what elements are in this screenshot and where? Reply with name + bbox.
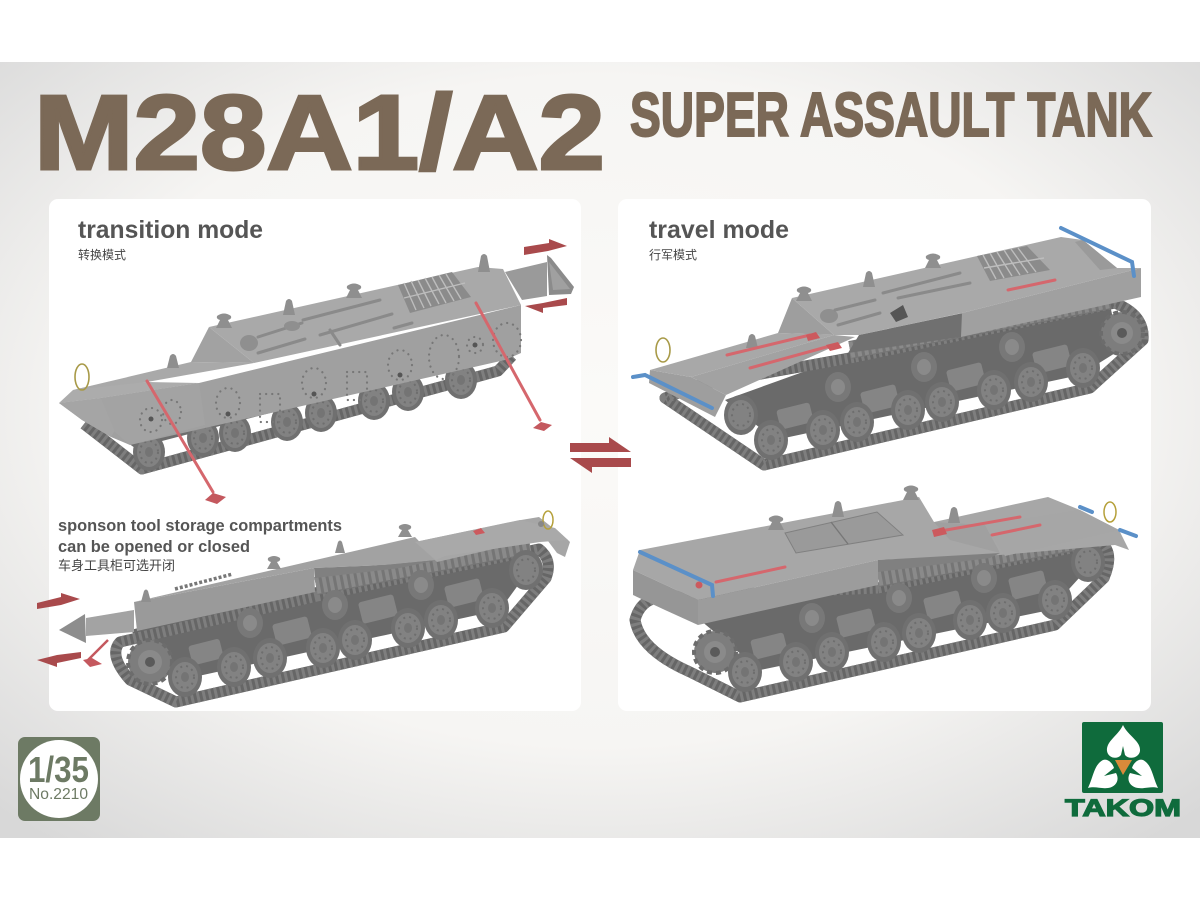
- sprocket: [128, 640, 172, 684]
- red stabiliser rods and feet: [147, 303, 552, 504]
- rear deck: [415, 517, 570, 562]
- tank: travel mode, upper view: [633, 228, 1143, 465]
- red latch and handle: [473, 528, 485, 535]
- wide top track run: [878, 538, 1095, 578]
- panel: travel mode: [618, 199, 1151, 711]
- panel: transition mode: [49, 199, 581, 711]
- rivet clusters: [140, 323, 521, 432]
- hull side: [59, 305, 521, 445]
- title: M28A1/A2: M28A1/A2: [34, 74, 605, 192]
- suspension units: [188, 578, 484, 666]
- tank: transition mode, lower view: [59, 511, 570, 702]
- idler: [509, 550, 543, 590]
- callout: sponson tool storage: can be opened or closed: [58, 537, 250, 556]
- blue tow bars: [633, 228, 1134, 408]
- lugs: [746, 254, 941, 348]
- blue tow bars: [640, 507, 1136, 596]
- lugs: [768, 486, 960, 530]
- arrows: spade motion: [37, 239, 567, 667]
- lifting lugs: [167, 254, 490, 368]
- closed tool box: [785, 512, 903, 553]
- lugs: [141, 524, 412, 602]
- red stowed rods: [727, 280, 1055, 368]
- heading: transition mode: 转换模式: [78, 247, 126, 262]
- arrows: mode switch: [570, 437, 631, 473]
- logo: Takom: [1065, 722, 1181, 822]
- spade arrowhead and bar: [59, 610, 134, 643]
- rollers: [237, 570, 434, 638]
- tank: travel mode, lower view: [633, 486, 1136, 697]
- hull shapes: [633, 497, 1129, 600]
- grating rack: [977, 246, 1050, 281]
- callout: sponson tool storage: [58, 516, 342, 573]
- wide top track run: [850, 300, 1110, 350]
- badge: scale 1/35: [18, 737, 100, 821]
- heading: transition mode: [78, 216, 263, 262]
- rear spade extension: [505, 255, 574, 300]
- wide top track run: [316, 545, 530, 586]
- badge: scale 1/35: No.2210: [29, 786, 88, 803]
- yellow handle: [656, 338, 670, 362]
- hull shapes: [649, 370, 726, 417]
- sponson box: [134, 568, 315, 631]
- red stowed rods: [696, 517, 1040, 588]
- heading: travel mode: [649, 216, 789, 262]
- stowed rack edge: [175, 574, 233, 589]
- callout: sponson tool storage: sponson tool storage compartments: [58, 516, 342, 535]
- heading: travel mode: travel mode: [649, 216, 789, 244]
- logo: Takom: TAKOM: [1065, 795, 1181, 822]
- badge: scale 1/35: 1/35: [28, 749, 89, 790]
- grating rack: [398, 272, 471, 313]
- yellow handle: [1104, 502, 1116, 522]
- heading: travel mode: 行军模式: [649, 248, 697, 262]
- yellow handle: [75, 364, 89, 390]
- stowed tools: [240, 300, 412, 353]
- callout: sponson tool storage: 车身工具柜可选开闭: [58, 558, 175, 573]
- stowed tools: [820, 273, 970, 325]
- heading: transition mode: transition mode: [78, 216, 263, 244]
- tank: transition mode, spade deployed: [59, 254, 574, 504]
- red foot: [88, 640, 108, 660]
